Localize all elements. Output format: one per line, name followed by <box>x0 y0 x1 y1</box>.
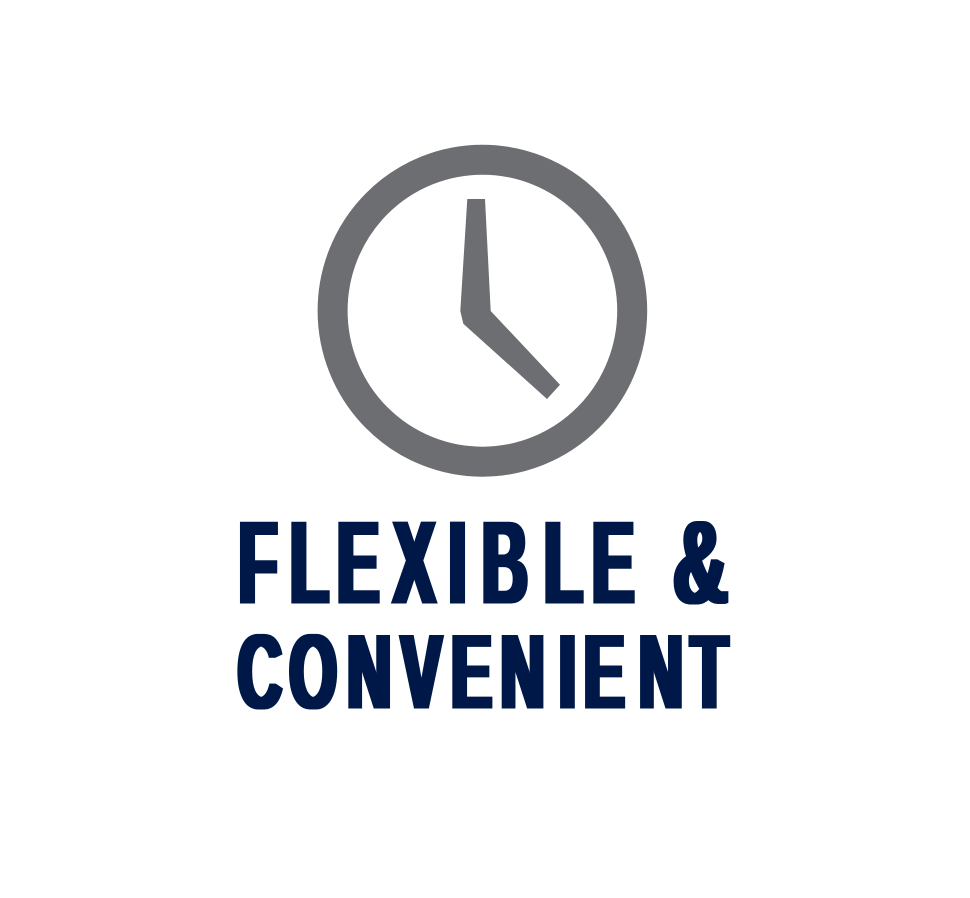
title line 1: ampersand: & <box>673 497 728 630</box>
title line 1: Flexible: FLEXIBLE <box>239 497 634 630</box>
clock hands <box>460 199 560 399</box>
title: Flexible & Convenient <box>238 497 728 732</box>
title line 2: CONVENIENT <box>238 612 728 732</box>
icon: clock <box>333 160 632 462</box>
clock face ring <box>333 160 632 462</box>
